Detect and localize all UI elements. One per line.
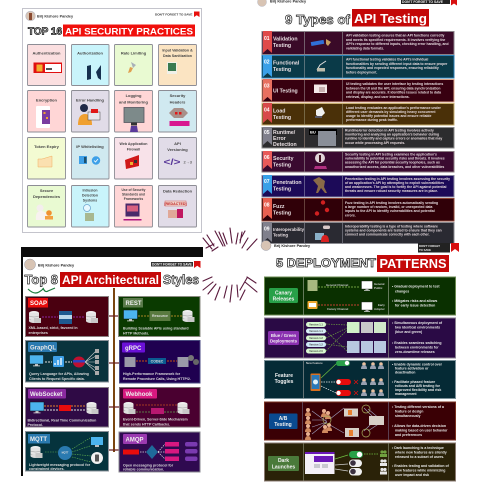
panel: top 8 API architectural styles — [21, 247, 203, 476]
row 01: and meets its specified requirements. It involves verifying the — [346, 38, 445, 42]
card: Web Application Firewall: Web Application — [120, 142, 147, 146]
card: MQTT — [26, 432, 108, 471]
card: Token Expiry: Token Expiry — [34, 144, 60, 149]
row: Canary Releases: Canary Channel — [327, 307, 349, 311]
title — [24, 272, 199, 287]
title: API Architectural — [62, 275, 159, 287]
row 06: unauthorized access, data breaches, and other vulnerabilities — [345, 165, 444, 169]
row 07: 07 — [264, 179, 270, 185]
row 01: validating data formats. — [346, 46, 384, 50]
row 09: Interoperability testing is a type of testing where software — [345, 224, 438, 228]
row 08 — [262, 198, 454, 221]
row: Feature Toggles: deactivation — [395, 370, 415, 374]
card: Input Validation: Data Sanitization — [163, 54, 192, 58]
row: Blue / Green Deployments: Blue / Green — [271, 333, 297, 338]
row: Dark Launches — [264, 443, 456, 481]
card: WebSocket: WebSocket — [30, 392, 62, 398]
card: Intrusion Detection Systems: Intrusion — [83, 188, 97, 192]
row: Canary Releases: Canary — [275, 290, 292, 296]
title: 5 DEPLOYMENT — [276, 256, 377, 270]
author header: DON'T FORGET — [419, 244, 440, 248]
card: WebSocket: Bidirectional, Real Time Communication — [28, 418, 96, 422]
title: Top 8 — [24, 272, 58, 287]
card: Authorization — [72, 44, 109, 86]
title: API SECURITY PRACTICES — [65, 26, 193, 36]
card: Security Headers — [158, 90, 196, 132]
row: Blue / Green Deployments: two identical environments — [395, 326, 440, 330]
row 02: functionality and expected responses, ensuring reliability — [346, 66, 439, 70]
row 04: Load — [273, 108, 285, 114]
row 08: a large number of random, invalid, or unexpected data — [345, 205, 433, 209]
row: Dark Launches: where new features are silently — [394, 450, 447, 454]
row: Dark Launches: user impact and risk — [395, 473, 429, 477]
card: AMQP — [119, 432, 200, 472]
row 05: monitoring and analyzing an application's behavior during — [345, 133, 439, 137]
row: Canary Releases: General — [374, 282, 385, 286]
row 03: UI testing validates the user interface by testing interactions — [346, 82, 443, 86]
row 01: API's response to different inputs, checking error handling, and — [346, 42, 449, 46]
row 04: different user demands by simulating heavy concurrent — [346, 110, 436, 114]
row 09 — [262, 222, 454, 244]
row 03: UI Testing — [273, 88, 298, 94]
row 01: 01 — [264, 36, 270, 42]
row 05: occur while processing API requests. — [345, 141, 405, 145]
row: Canary Releases: Public — [374, 286, 383, 290]
card: API Versioning: </> — [164, 157, 180, 167]
card: Authorization: Authorization — [77, 50, 103, 56]
row: Feature Toggles: rollouts and A/B testing for — [395, 384, 441, 388]
row 04 — [262, 103, 454, 125]
row 04: Testing — [273, 115, 291, 121]
row 02: 02 — [264, 60, 270, 66]
card: gRPC: High-Performance Framework for — [123, 372, 181, 376]
card: SOAP: enterprises — [28, 331, 48, 335]
row 08: Testing — [273, 210, 291, 216]
row: Blue / Green Deployments: Version 1.1 — [309, 322, 323, 326]
card: AMQP: AMQP — [126, 438, 144, 444]
panel: nine types of API testing — [258, 0, 457, 244]
author header — [26, 11, 200, 21]
row: Dark Launches: Launches — [272, 464, 295, 470]
row 05: BU — [310, 130, 316, 134]
row: Feature Toggles: improved flexibility and risk — [395, 388, 441, 392]
title: API Testing — [354, 11, 427, 26]
row: Feature Toggles: New Feature — [306, 361, 323, 365]
card: Webhook: Event-Driven, Server-Side Mechanism — [123, 418, 188, 422]
card: SOAP: XML-based, strict, favored in — [28, 326, 78, 330]
row 08: inputs to the API to identify vulnerabilities and potential — [345, 209, 435, 213]
card: MQTT: MQTT — [30, 437, 47, 443]
row 02: Functional — [273, 60, 300, 66]
card: gRPC: Remote Procedure Calls, Using HTTP/2. — [123, 377, 191, 381]
row 01: Testing — [273, 43, 291, 49]
row 07: Penetration testing in API testing involves assessing the security — [345, 177, 450, 181]
card: Web Application Firewall — [114, 138, 152, 179]
row 09: Interoperability — [273, 227, 305, 232]
row: Blue / Green Deployments: • Simultaneous deployment of — [392, 321, 443, 325]
row: Blue / Green Deployments — [264, 318, 456, 358]
card: Rate Limiting: Rate Limiting — [121, 50, 147, 56]
row: A/B Testing: and preferences — [395, 433, 422, 437]
card: REST: Building Scalable APIs using standard — [123, 326, 189, 330]
connector spine — [109, 288, 119, 452]
row 06: vulnerability to potential security risks and threats. It involves — [345, 157, 445, 161]
card: Intrusion Detection Systems: Detection — [82, 194, 98, 198]
row 06: Security — [273, 156, 294, 162]
title: TOP 16 — [28, 26, 62, 38]
title: 9 Types of — [285, 12, 351, 27]
row: Feature Toggles — [264, 360, 456, 399]
icon: green squiggle arrow — [28, 288, 55, 293]
row: Canary Releases — [264, 277, 456, 315]
title: PATTERNS — [380, 257, 446, 271]
row 06: 06 — [264, 155, 270, 161]
card: Secure Dependencies: Secure — [40, 188, 54, 193]
card: Input Validation — [158, 44, 196, 86]
row 01: Validation — [273, 36, 298, 42]
row: Blue / Green Deployments: between environments for — [395, 346, 439, 350]
row 03: retrieval, display, and user interactions. — [346, 95, 410, 99]
card: SOAP: SOAP — [30, 301, 47, 307]
row: Blue / Green Deployments: • Enables seamless switching — [392, 341, 441, 345]
row: Canary Releases: General Channel — [326, 283, 348, 287]
row 09: Testing — [273, 232, 288, 238]
row: Dark Launches: Dark — [278, 458, 289, 464]
card: Logging and Monitoring — [114, 90, 152, 132]
row: A/B Testing: • Testing different versions of a — [392, 405, 444, 409]
row: Blue / Green Deployments: zero-downtime releases — [395, 350, 435, 354]
card: MQTT: Lightweight messaging protocol for — [29, 463, 91, 467]
card: Intrusion Detection Systems — [72, 186, 109, 227]
row 02: API functional testing validates the API's individual — [346, 58, 428, 62]
decorative burst — [203, 228, 257, 302]
card: Webhook — [120, 388, 200, 427]
card: IP Whitelisting — [72, 138, 109, 179]
row 05: Error — [273, 136, 286, 142]
title — [285, 9, 429, 27]
row: A/B Testing — [264, 402, 456, 440]
row 07: threats and ensure robust security measures are in place. — [345, 189, 438, 193]
row 03: and display are accurate. It identifies issues related to data — [346, 91, 441, 95]
row 08: Fuzz — [273, 204, 285, 210]
row 09: connect and communicate correctly with each other. — [345, 233, 430, 237]
row: Canary Releases: • Mitigates risks and allows — [392, 299, 437, 303]
row: Feature Toggles: Toggles — [275, 379, 294, 385]
row 09: 09 — [264, 226, 270, 232]
card: WebSocket: Protocol. — [28, 423, 43, 427]
row: Feature Toggles: feature activation or — [395, 366, 429, 370]
row 05: Runtime/ — [273, 130, 296, 136]
row: Feature Toggles: • Enable dynamic control over — [392, 362, 443, 366]
card: REST: HTTP Methods. — [123, 332, 149, 336]
card: Logging and Monitoring: and Monitoring — [119, 100, 148, 104]
row 07: Penetration — [273, 180, 302, 186]
row 08: errors. — [345, 213, 356, 217]
row: Blue / Green Deployments: (blue and green) — [395, 330, 422, 334]
row 01: API validation testing ensures that an API functions correctly — [346, 34, 445, 38]
row 05 — [262, 127, 454, 148]
card: Data Redaction: Data Redaction — [163, 188, 193, 194]
row 02: before deployment. — [346, 70, 377, 74]
row 06: Security testing in API testing examines the application's — [345, 152, 437, 156]
title — [28, 24, 195, 38]
card: GraphQL — [26, 340, 108, 382]
row 07: of an application's API by attempting to exploit vulnerabilities — [345, 181, 444, 185]
row: Canary Releases: Adopter — [374, 307, 386, 311]
row 06 — [262, 151, 454, 172]
card: Secure Dependencies: Dependencies — [33, 194, 61, 199]
author header — [261, 240, 459, 252]
row 07: and weaknesses. The goal is to fortify the API against potential — [345, 185, 446, 189]
card: Standards and Frameworks: Use of Security — [121, 188, 146, 192]
row: Canary Releases: • Gradual deployment to test — [392, 284, 440, 288]
author header: Brij Kishore Pandey — [37, 14, 74, 18]
row: Canary Releases: changes — [395, 290, 409, 294]
row: Dark Launches: • Dark launching is a technique — [392, 446, 444, 450]
card: Standards and Frameworks: Frameworks — [124, 197, 143, 201]
card: GraphQL: GraphQL — [30, 346, 56, 352]
author header: DON'T FORGET TO SAVE — [155, 12, 192, 16]
card: Input Validation: Input Validation & — [162, 48, 193, 52]
row 04: performance during peak traffic. — [346, 118, 398, 122]
row: Feature Toggles: • Facilitate phased feature — [392, 380, 435, 384]
row: Canary Releases: Releases — [273, 297, 295, 303]
row: Blue / Green Deployments: Deployments — [270, 338, 298, 344]
card: Secure Dependencies — [28, 186, 66, 227]
row 07 — [262, 175, 454, 197]
card: Intrusion Detection Systems: Systems — [83, 198, 97, 202]
card: Standards and Frameworks: Standards and — [122, 192, 145, 196]
row 01 — [262, 31, 454, 54]
row: Dark Launches: new features while minimizing — [395, 468, 445, 472]
row: Blue / Green Deployments: Version 1.2 — [309, 342, 323, 346]
card: Security Headers: Security — [170, 93, 186, 98]
author header: TO SAVE — [419, 248, 431, 252]
card: Security Headers: Headers — [170, 100, 186, 104]
row: Feature Toggles: management — [395, 392, 417, 396]
card: API Versioning: API — [174, 141, 181, 146]
row 06: Testing — [273, 162, 291, 168]
card: GraphQL: Query Language for APIs, Allowing — [29, 372, 89, 376]
card: Data Redaction: [REDACTED] — [164, 202, 187, 206]
row 07: Testing — [273, 186, 291, 192]
row 05: runtime to identify and capture errors or anomalies that may — [345, 137, 442, 141]
row 02: functionalities by sending different input data to ensure proper — [346, 62, 448, 66]
panel: API security practices — [22, 8, 202, 232]
row 03: 03 — [264, 84, 270, 90]
author header: Brij Kishore Pandey — [38, 264, 75, 268]
card: gRPC: gRPC — [125, 346, 142, 352]
row 08: 08 — [264, 202, 270, 208]
row 04: Load testing evaluates an application's performance under — [346, 106, 442, 110]
card: Webhook: Webhook — [126, 392, 153, 398]
author header — [258, 0, 457, 6]
row: A/B Testing: making based on user behavior — [395, 428, 448, 432]
card: MQTT: constrained devices. — [29, 467, 65, 471]
card: IP Whitelisting: IP Whitelisting — [76, 144, 104, 149]
card: Rate Limiting — [114, 44, 152, 86]
row 02: Testing — [273, 67, 291, 73]
row: Blue / Green Deployments: Version 2.0 — [309, 349, 323, 353]
row 02 — [262, 55, 454, 78]
card: MQTT: MQTT — [62, 452, 69, 454]
row: A/B Testing: simultaneously — [395, 414, 421, 418]
card: API Versioning — [158, 138, 196, 179]
row 03: between the UI and the API, ensuring data synchronization — [346, 86, 440, 90]
row 09: systems and components are tested to ensure that they can — [345, 229, 442, 233]
row: Dark Launches: • Enables testing and validation of — [392, 464, 450, 468]
row: A/B Testing: feature or design — [395, 410, 423, 414]
title — [276, 255, 449, 272]
row 05: 05 — [264, 130, 270, 136]
card: WebSocket — [26, 388, 108, 427]
card: Standards and Frameworks — [114, 186, 152, 227]
row 04: 04 — [264, 108, 270, 114]
row 03 — [262, 79, 454, 102]
row: Blue / Green Deployments: Version 1.1 — [309, 329, 323, 333]
row 08: Fuzz testing in API testing involves automatically sending — [345, 201, 438, 205]
author header — [24, 259, 200, 270]
card: API Versioning: 2→3 — [184, 160, 193, 164]
card: SOAP — [26, 296, 108, 336]
row 05: Runtime/error detection in API testing involves actively — [345, 128, 434, 132]
card: Data Redaction — [158, 186, 196, 227]
row 04: usage to identify potential issues and ensure reliable — [346, 114, 431, 118]
row: Feature Toggles: Feature — [275, 373, 293, 379]
card: gRPC: CODEC — [151, 360, 164, 364]
row: Blue / Green Deployments: Version 1.2 — [309, 336, 323, 340]
author header: Brij Kishore Pandey — [274, 244, 311, 248]
card: Authentication: Authentication — [32, 50, 61, 56]
row: Canary Releases: for early issue detection — [395, 304, 435, 308]
card: Error Handling: Error Handling — [76, 98, 105, 102]
card: Authentication — [28, 44, 66, 86]
row: A/B Testing: • Allows for data-driven decision — [392, 424, 446, 428]
author header: DON'T FORGET TO SAVE — [152, 263, 193, 267]
card: AMQP: reliable communication. — [123, 468, 164, 472]
row: Dark Launches: released to a subset of users. — [395, 455, 444, 459]
card: Encryption: Encryption — [36, 98, 58, 102]
row: A/B Testing: A/B — [279, 416, 288, 422]
card: REST: Resource — [152, 314, 168, 318]
row: A/B Testing: Testing — [274, 422, 292, 428]
card: REST: REST — [126, 301, 142, 307]
card: API Versioning: Versioning — [167, 147, 188, 152]
title: Styles — [163, 272, 199, 287]
card: Logging and Monitoring: Logging — [126, 93, 142, 98]
card: AMQP: Open messaging protocol for — [123, 464, 174, 468]
card: Webhook: that sends HTTP Callbacks. — [123, 422, 170, 426]
card: Web Application Firewall: Firewall — [127, 148, 140, 152]
card: Encryption — [28, 90, 66, 132]
card: REST — [118, 296, 200, 336]
row 06: assessing the API for potential security loopholes, such as — [345, 161, 440, 165]
panel: five deployment patterns — [261, 240, 459, 481]
row: Canary Releases: Early — [378, 303, 385, 307]
row 05: Detection — [273, 142, 297, 148]
card: gRPC — [120, 340, 200, 383]
card: Token Expiry — [28, 138, 66, 179]
card: Error Handling — [72, 90, 109, 132]
card: GraphQL: Clients to Request Specific data. — [29, 377, 85, 381]
